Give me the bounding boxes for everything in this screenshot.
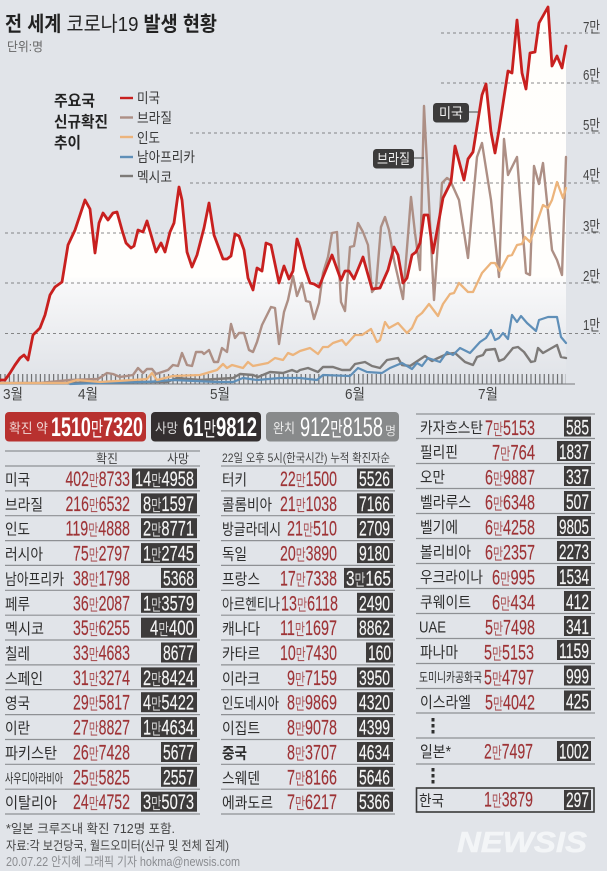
- row: 독일: 9180: [359, 543, 390, 566]
- row: 아르헨티나: 아르헨티나: [222, 595, 280, 613]
- row: 에콰도르: 에콰도르: [222, 794, 273, 812]
- row: 카자흐스탄: 585: [566, 416, 589, 440]
- row: UAE: 341: [566, 616, 589, 639]
- row: 미국: 14만4958: [135, 467, 194, 491]
- row: 일본: 일본*: [420, 743, 451, 761]
- row: UAE: 5만7498: [485, 616, 535, 640]
- row: 페루: 1만3579: [143, 591, 194, 615]
- row: 벨라루스: 6만6348: [485, 490, 535, 514]
- column 1 header: [5, 451, 200, 814]
- row: 볼리비아: 6만2357: [485, 540, 535, 564]
- summary badge: confirmed: 1510만7320: [51, 412, 143, 442]
- row: 방글라데시: [222, 517, 393, 541]
- row: 독일: 20만3890: [280, 542, 337, 566]
- row: 볼리비아: 2273: [559, 541, 589, 564]
- row: 아르헨티나: 2490: [359, 592, 390, 615]
- row: 인도: 2만8771: [143, 517, 194, 541]
- row: 페루: 36만2087: [73, 591, 130, 615]
- x axis baseline: [0, 383, 575, 385]
- row: 이집트: 4399: [359, 717, 390, 740]
- legend: 멕시코: [137, 169, 172, 185]
- row: 프랑스: [222, 566, 393, 590]
- row: 사우디아라비아: [5, 765, 197, 789]
- row: 우크라이나: 1534: [559, 566, 589, 589]
- row: 이라크: 9만7159: [287, 666, 337, 690]
- summary badge: recovered: 완치: [273, 421, 295, 436]
- row: 아르헨티나: [222, 591, 393, 615]
- row: 이집트: 이집트: [222, 720, 260, 738]
- row: 칠레: 8677: [163, 642, 194, 665]
- row: 멕시코: 35만6255: [73, 616, 130, 640]
- row: 카타르: 10만7430: [280, 641, 337, 665]
- row: 한국 highlighted: [416, 788, 594, 812]
- row: 필리핀: 필리핀: [420, 444, 458, 462]
- legend: 브라질: [137, 110, 172, 126]
- row: 스페인: 31만3274: [73, 666, 130, 690]
- row: 중국: 8만3707: [287, 740, 337, 764]
- row: 방글라데시: 방글라데시: [222, 521, 281, 539]
- row: 러시아: 1만2745: [143, 542, 194, 566]
- row: 터키: 5526: [359, 468, 390, 491]
- row: 남아프리카: 38만1798: [73, 566, 130, 590]
- row: 인도: 119만4888: [66, 517, 130, 541]
- x axis month labels: [3, 386, 498, 403]
- row: 스웨덴: 5646: [359, 766, 390, 789]
- summary badge: deaths: 사망: [155, 421, 178, 436]
- row: 이탈리아: 24만4752: [73, 790, 130, 814]
- row: 러시아: 러시아: [5, 546, 43, 564]
- row: 도미니카공화국: 999: [566, 666, 589, 688]
- row: 인도: 인도: [5, 521, 30, 539]
- row: 이란: [5, 716, 197, 740]
- row: 카타르: [222, 641, 393, 665]
- y axis labels: 3만: [583, 218, 600, 235]
- row: 미국: 402만8733: [66, 467, 130, 491]
- row: 벨라루스: [420, 490, 591, 514]
- row: 스페인: [5, 666, 197, 690]
- callout: United States: 미국: [439, 105, 463, 121]
- y axis labels: 7만: [583, 19, 600, 36]
- row: 칠레: [5, 641, 197, 665]
- callout: United States: [433, 103, 478, 122]
- row: 멕시코: [5, 616, 197, 640]
- x axis month labels: 6월: [345, 386, 365, 403]
- row: 사우디아라비아: 25만5825: [73, 765, 130, 789]
- title: 전 세계 코로나19 발생 현황: [5, 13, 217, 36]
- summary badge: confirmed: 확진 약: [9, 421, 48, 436]
- row: 볼리비아: 볼리비아: [420, 544, 471, 562]
- row: 쿠웨이트: 412: [566, 591, 589, 614]
- row: 영국: 4만5422: [143, 691, 194, 715]
- row: 카타르: 160: [368, 642, 391, 665]
- x axis month labels: 5월: [210, 386, 230, 403]
- row: 방글라데시: 2709: [359, 518, 390, 541]
- row: 한국 highlighted: 1만3879: [484, 788, 533, 812]
- row: 이스라엘: [420, 690, 591, 714]
- row: 인도네시아: 8만9869: [287, 691, 337, 715]
- table column 2: [221, 451, 395, 814]
- row: 이스라엘: 5만4042: [485, 690, 535, 714]
- legend: 미국: [137, 90, 160, 106]
- row: 쿠웨이트: 6만434: [492, 590, 535, 614]
- row: 이집트: 8만9078: [287, 716, 337, 740]
- row: 브라질: 브라질: [5, 496, 43, 514]
- row: 이란: 1만4634: [143, 716, 194, 740]
- row: 스페인: 2만8424: [143, 666, 194, 690]
- row: 우크라이나: 우크라이나: [420, 568, 483, 586]
- legend title: 주요국: [54, 93, 95, 110]
- row: 중국: 4634: [359, 742, 390, 764]
- row: 브라질: 216만6532: [66, 492, 130, 516]
- row: 브라질: [5, 492, 197, 516]
- row: 사우디아라비아: 2557: [163, 766, 194, 789]
- x axis month labels: 7월: [478, 386, 498, 403]
- row: 오만: 오만: [420, 468, 445, 486]
- x axis month labels: 3월: [3, 386, 23, 403]
- row: 파나마: 1159: [559, 640, 589, 663]
- row: 사우디아라비아: 사우디아라비아: [5, 771, 63, 786]
- ellipsis: [432, 718, 434, 734]
- row: 터키: [222, 467, 393, 491]
- summary badge: recovered: 912만8158: [300, 412, 383, 442]
- row: 칠레: 칠레: [5, 645, 30, 663]
- row: 일본: 1002: [559, 740, 589, 764]
- column 2 header: 22일 오후 5시(한국시간) 누적 확진자순: [222, 451, 390, 465]
- row: 칠레: 33만4683: [73, 641, 130, 665]
- row: UAE: UAE: [419, 620, 446, 636]
- line chart: new confirmed cases: [0, 7, 600, 403]
- summary badge: confirmed: [5, 412, 146, 442]
- row: 벨기에: 벨기에: [420, 518, 458, 536]
- row: 우크라이나: 6만995: [492, 566, 535, 590]
- row: 에콰도르: [222, 790, 393, 814]
- row: 이스라엘: 425: [566, 690, 589, 714]
- y axis labels: 6만: [583, 67, 600, 84]
- row: 오만: 337: [566, 466, 589, 489]
- row: 미국: [5, 467, 197, 491]
- row: 콜롬비아: 콜롬비아: [222, 496, 272, 514]
- credit: 20.07.22 안지혜 그래픽 기자 hokma@newsis.com: [6, 855, 240, 869]
- y axis labels: 4만: [583, 167, 600, 184]
- column 2 header: [221, 451, 395, 814]
- row: 프랑스: 3만165: [346, 566, 391, 590]
- row: 에콰도르: 5366: [359, 791, 390, 814]
- row: 오만: [420, 466, 591, 490]
- row: 일본: 2만7497: [484, 740, 533, 764]
- row: 도미니카공화국: 5만4797: [484, 666, 534, 690]
- row: 이라크: [222, 666, 393, 690]
- row: 이라크: 이라크: [222, 670, 260, 688]
- row: 파키스탄: [5, 740, 197, 764]
- column 1 header: 사망: [167, 452, 189, 466]
- row: 필리핀: 1837: [559, 441, 589, 464]
- summary badge: deaths: 61만9812: [183, 412, 257, 442]
- chart area fill under US line: [0, 7, 566, 384]
- unit note: 단위:명: [7, 40, 43, 54]
- gridlines: [5, 33, 600, 334]
- row: 터키: 22만1500: [280, 467, 337, 491]
- line: United States: [0, 7, 566, 380]
- row: 캐나다: [222, 616, 393, 640]
- row: 도미니카공화국: [419, 666, 591, 690]
- row: 페루: 페루: [5, 595, 30, 613]
- row: 카자흐스탄: 7만5153: [485, 416, 535, 440]
- row: 러시아: [5, 542, 197, 566]
- legend: 인도: [137, 130, 160, 146]
- row: 필리핀: 7만764: [492, 440, 535, 464]
- row: 터키: 터키: [222, 471, 247, 489]
- legend title: 추이: [54, 134, 81, 152]
- row: 스웨덴: 스웨덴: [222, 769, 260, 787]
- row: 독일: [222, 542, 393, 566]
- row: 파나마: 5만5153: [484, 640, 534, 664]
- x axis month labels: 4월: [78, 386, 98, 403]
- row: 파키스탄: 26만7428: [73, 740, 130, 764]
- summary badge: recovered: 명: [385, 424, 396, 438]
- row: 캐나다: 11만1697: [280, 616, 337, 640]
- row: 벨라루스: 507: [566, 491, 589, 514]
- row: 도미니카공화국: 도미니카공화국: [419, 670, 482, 685]
- summary badge: deaths: [151, 412, 261, 442]
- legend: 남아프리카: [137, 149, 195, 165]
- y axis labels: 5만: [583, 117, 600, 134]
- row: 벨기에: 6만4258: [485, 516, 535, 540]
- row: 카타르: 카타르: [222, 645, 260, 663]
- row: 벨라루스: 벨라루스: [420, 494, 471, 512]
- row: 카자흐스탄: 카자흐스탄: [420, 419, 483, 437]
- row: 이탈리아: 3만5073: [143, 790, 194, 814]
- row: 남아프리카: [5, 566, 197, 590]
- row: 쿠웨이트: 쿠웨이트: [420, 594, 471, 612]
- row: 캐나다: 8862: [359, 617, 390, 640]
- row: 스웨덴: [222, 765, 393, 789]
- line: South Africa: [70, 315, 566, 384]
- row: 프랑스: 프랑스: [222, 570, 260, 588]
- y axis labels: 2만: [583, 268, 600, 285]
- row: 벨기에: 9805: [559, 516, 589, 539]
- row: 독일: 독일: [222, 546, 247, 564]
- row: 방글라데시: 21만510: [287, 517, 337, 541]
- row: 일본: [420, 740, 591, 764]
- table column 3: [416, 414, 595, 812]
- row: 브라질: 8만1597: [143, 492, 194, 516]
- row: 오만: 6만9887: [485, 466, 535, 490]
- row: 볼리비아: [420, 540, 591, 564]
- row: 멕시코: 4만400: [150, 616, 194, 640]
- row: 이란: 27만8827: [73, 716, 130, 740]
- row: 카자흐스탄: [420, 416, 591, 440]
- row: 인도: [5, 517, 197, 541]
- y axis labels: [583, 19, 600, 334]
- callout: Brazil: [373, 149, 424, 168]
- row: 미국: 미국: [5, 471, 30, 489]
- line: Mexico: [67, 345, 566, 383]
- row: 아르헨티나: 13만6118: [281, 591, 338, 615]
- row: 중국: 중국: [222, 746, 247, 762]
- row: 한국 highlighted: 297: [566, 789, 589, 812]
- legend: [120, 90, 195, 185]
- row: UAE: [419, 616, 591, 640]
- row: 남아프리카: 5368: [163, 567, 194, 590]
- column 1 header: 확진: [96, 452, 118, 466]
- row: 스웨덴: 7만8166: [287, 765, 337, 789]
- row: 이집트: [222, 716, 393, 740]
- row: 이라크: 3950: [359, 667, 390, 690]
- y axis labels: 1만: [583, 317, 600, 334]
- row: 한국 highlighted: 한국: [419, 792, 444, 810]
- row: 파키스탄: 5677: [163, 742, 194, 764]
- row: 쿠웨이트: [420, 590, 591, 614]
- watermark: NEWSIS: NEWSIS: [457, 827, 588, 859]
- row: 러시아: 75만2797: [73, 542, 130, 566]
- row: 페루: [5, 591, 197, 615]
- row: 우크라이나: [420, 566, 591, 590]
- source: 자료:각 보건당국, 월드오미터(신규 및 전체 집계): [6, 839, 229, 853]
- row: 이탈리아: [5, 790, 197, 814]
- legend title: [54, 93, 108, 152]
- row: 벨기에: [420, 516, 591, 540]
- row: 필리핀: [420, 440, 591, 464]
- row: 콜롬비아: 7166: [359, 493, 390, 516]
- row: 스페인: 스페인: [5, 670, 43, 688]
- row: 이탈리아: 이탈리아: [5, 794, 57, 812]
- row: 파나마: 파나마: [420, 644, 458, 662]
- legend title: 신규확진: [54, 113, 108, 131]
- row: 캐나다: 캐나다: [222, 620, 260, 638]
- table column 1: [5, 451, 200, 814]
- row: 중국: [222, 740, 393, 764]
- row: 인도네시아: 인도네시아: [222, 695, 279, 713]
- row: 멕시코: 멕시코: [5, 620, 44, 638]
- row: 이스라엘: 이스라엘: [420, 694, 471, 712]
- line: India: [0, 182, 566, 383]
- line: Brazil: [0, 106, 566, 383]
- row: 인도네시아: 4320: [359, 692, 390, 715]
- row: 콜롬비아: [222, 492, 393, 516]
- x axis ticks: [0, 374, 566, 384]
- row: 프랑스: 17만7338: [280, 566, 337, 590]
- row: 이란: 이란: [5, 720, 30, 738]
- callout: Brazil: 브라질: [377, 151, 410, 167]
- row: 남아프리카: 남아프리카: [5, 570, 64, 588]
- row: 파키스탄: 파키스탄: [5, 744, 57, 762]
- footnote: *일본 크루즈내 확진 712명 포함.: [6, 822, 175, 836]
- row: 영국: 영국: [5, 695, 30, 713]
- row: 영국: 29만5817: [73, 691, 130, 715]
- ellipsis: [432, 768, 434, 784]
- row: 에콰도르: 7만6217: [287, 790, 337, 814]
- row: 콜롬비아: 21만1038: [280, 492, 337, 516]
- row: 영국: [5, 691, 197, 715]
- row: 파나마: [420, 640, 591, 664]
- row: 인도네시아: [222, 691, 393, 715]
